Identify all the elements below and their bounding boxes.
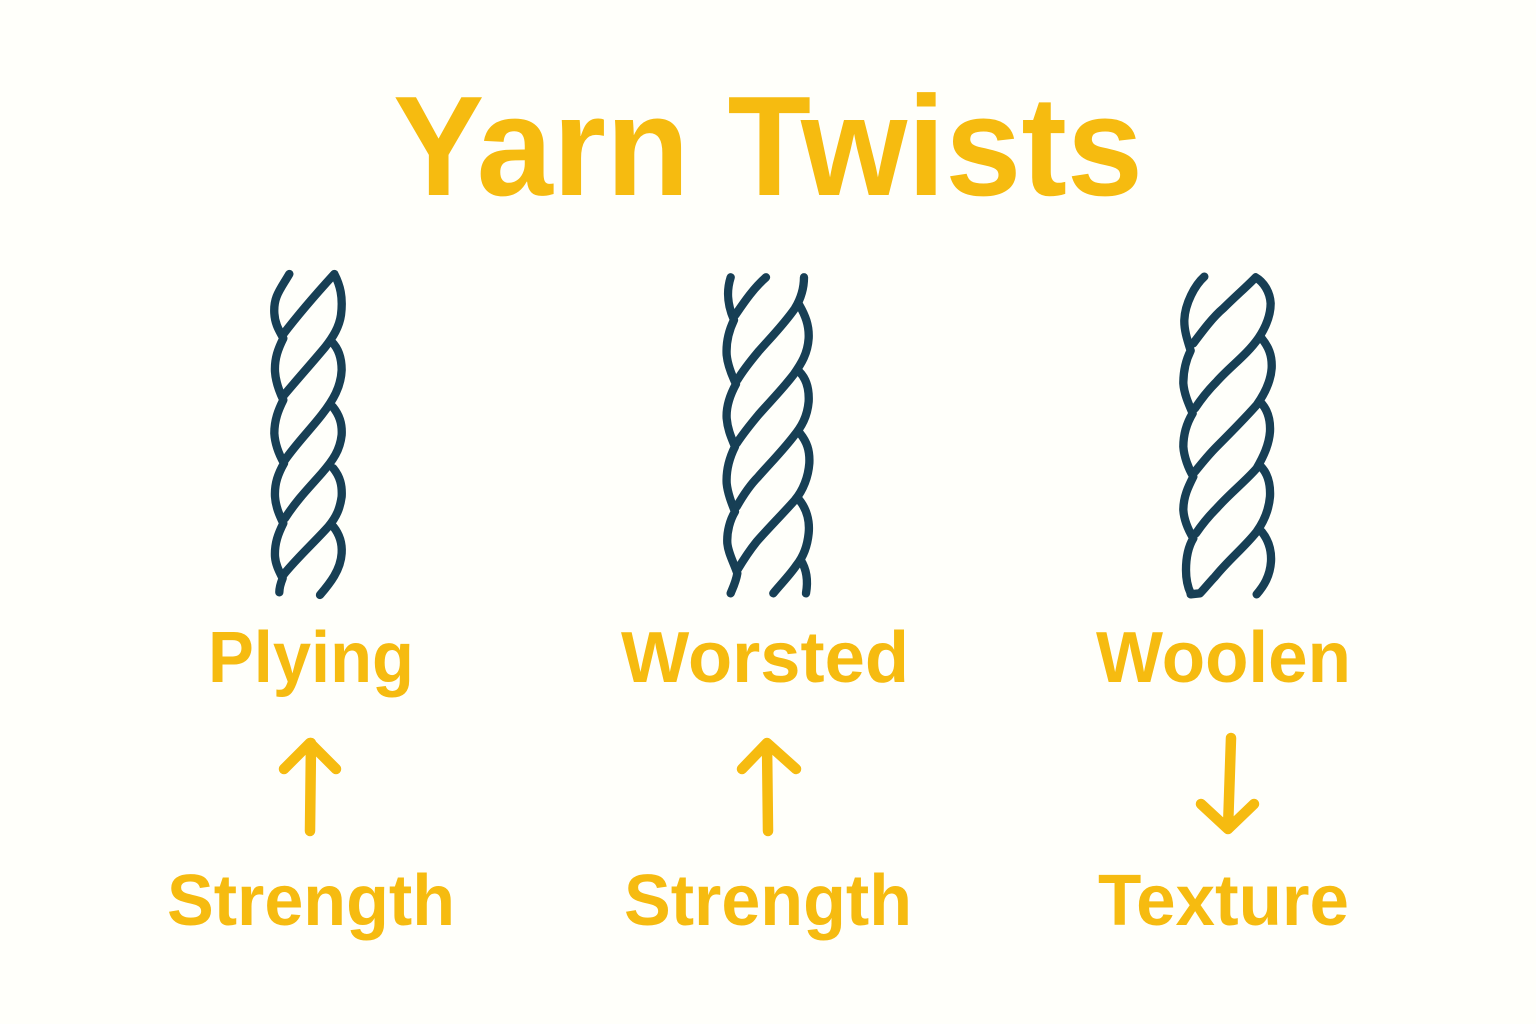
- arrow: down: [1201, 738, 1254, 829]
- panel: woolen column: [1096, 277, 1351, 941]
- label: Strength: Strength: [624, 861, 912, 941]
- panel: worsted column: [621, 277, 912, 941]
- panel: plying column: [167, 274, 455, 941]
- label: Texture: Texture: [1098, 861, 1349, 941]
- label: Strength: Strength: [167, 861, 455, 941]
- icon: worsted yarn twist: [727, 277, 809, 593]
- title: Yarn Twists: [393, 67, 1143, 226]
- label: Plying: Plying: [208, 618, 414, 698]
- icon: plying yarn twist: [274, 274, 342, 595]
- arrow: up: [284, 743, 336, 831]
- arrow: up: [742, 743, 796, 831]
- icon: woolen yarn twist: [1183, 277, 1272, 594]
- label: Worsted: Worsted: [621, 618, 909, 698]
- label: Woolen: Woolen: [1096, 618, 1351, 698]
